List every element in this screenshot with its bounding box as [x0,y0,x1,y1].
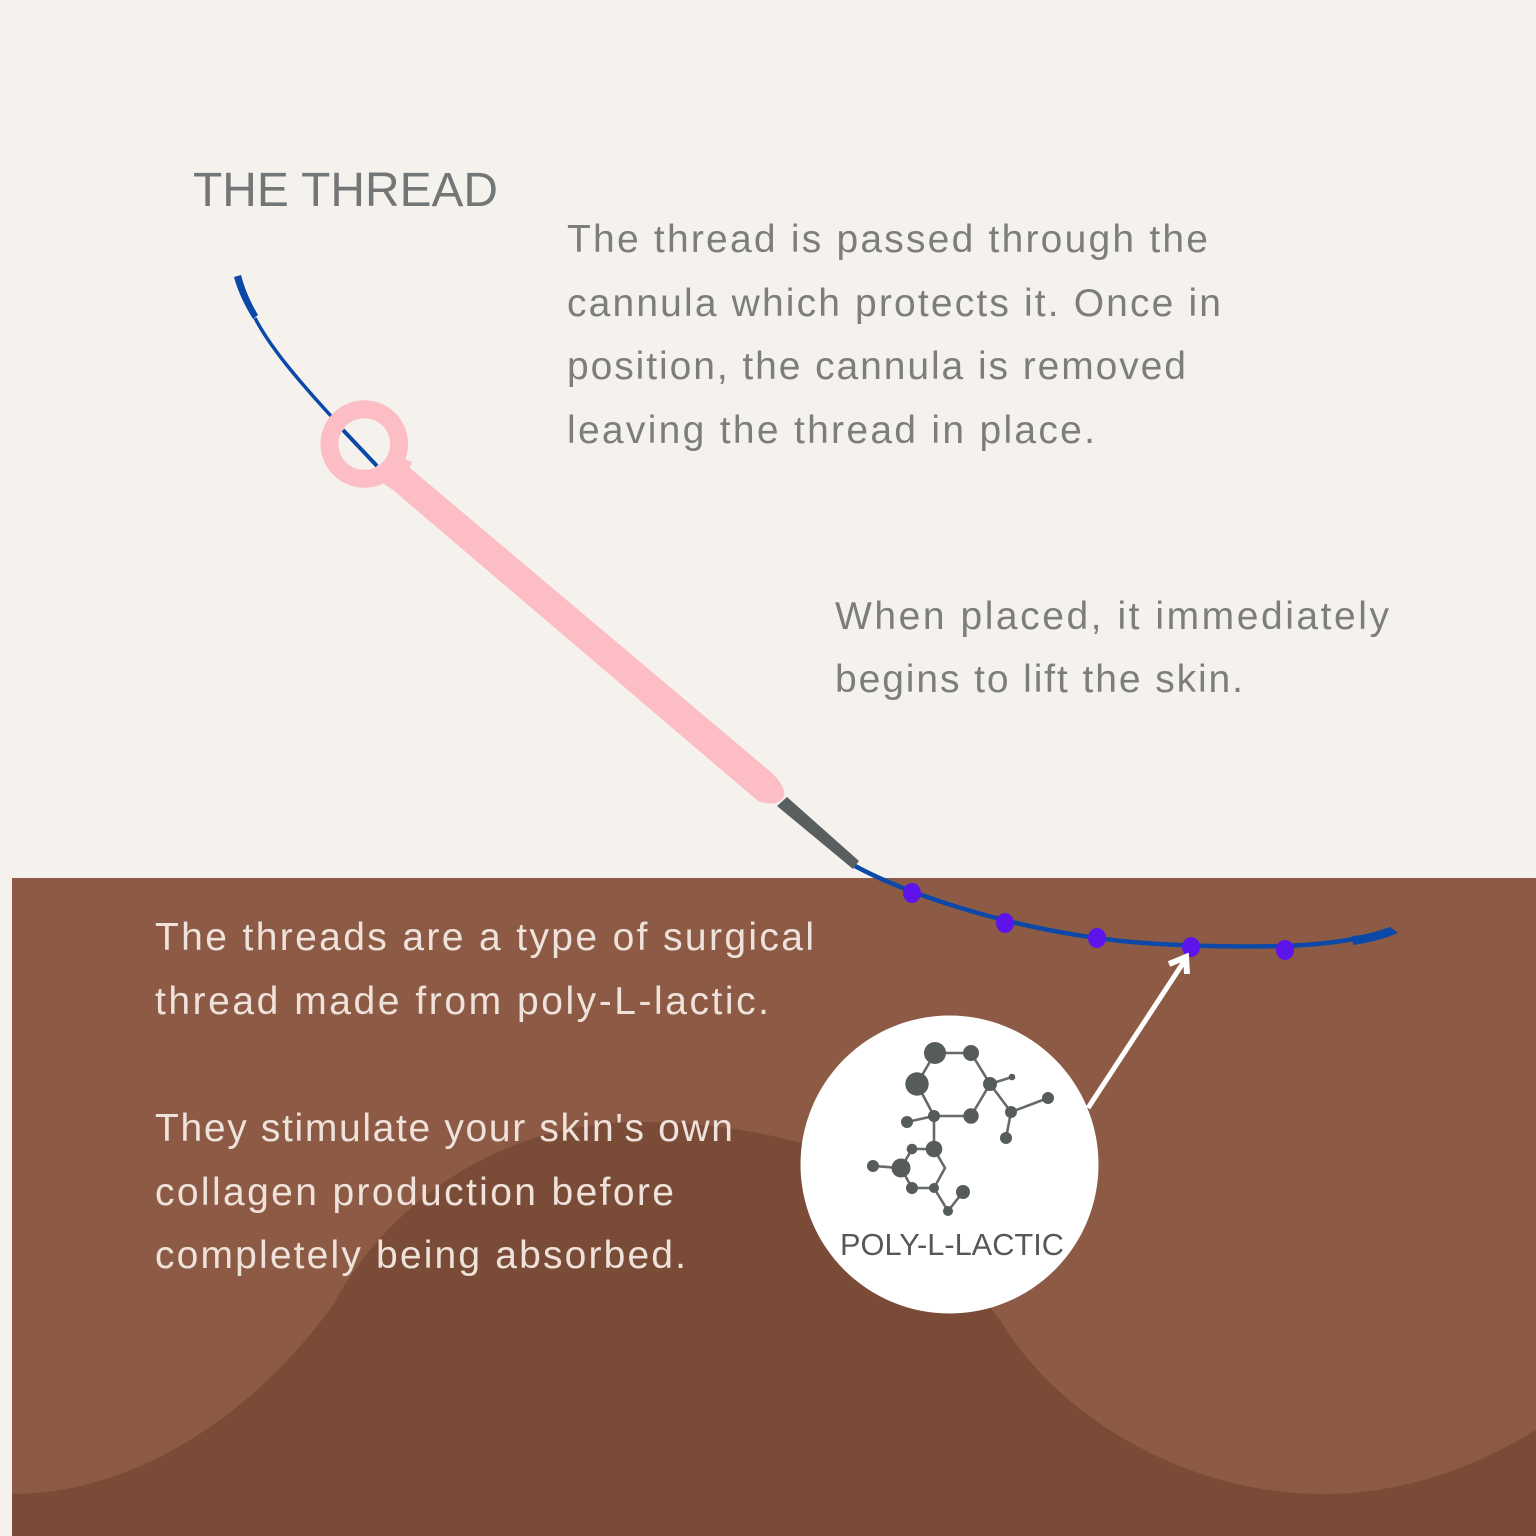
callout label: POLY-L-LACTIC [840,1227,1064,1262]
text block: lift: When placed, it immediately [835,595,1390,638]
text block: cannula: leaving the thread in place. [567,409,1095,452]
skin lower layer [12,1122,1536,1536]
title: THE THREAD [193,164,498,217]
text block: threads description: thread made from poly-L-lactic. [155,980,769,1023]
text block: cannula: position, the cannula is removed [567,345,1186,388]
thread barbs [903,883,1294,960]
thread: upper section [234,275,377,466]
callout: poly-L-lactic [800,1016,1098,1314]
icon: molecule [867,1042,1054,1216]
text block: threads description: collagen production before [155,1171,674,1214]
arrow [1088,957,1187,1108]
text block: threads description [155,916,814,1277]
text block: cannula: The thread is passed through the [567,218,1208,261]
cannula needle [777,797,859,869]
text block: threads description: The threads are a type of surgical [155,916,814,959]
text block: lift [835,595,1390,701]
panel: skin [12,878,1536,1536]
text block: cannula [567,218,1221,452]
text block: lift: begins to lift the skin. [835,658,1243,701]
text block: cannula: cannula which protects it. Once in [567,282,1221,325]
text block: threads description: completely being absorbed. [155,1234,686,1277]
thread: under skin [855,866,1398,946]
text block: threads description: They stimulate your skin's own [155,1107,733,1150]
cannula handle with ring [330,409,784,804]
